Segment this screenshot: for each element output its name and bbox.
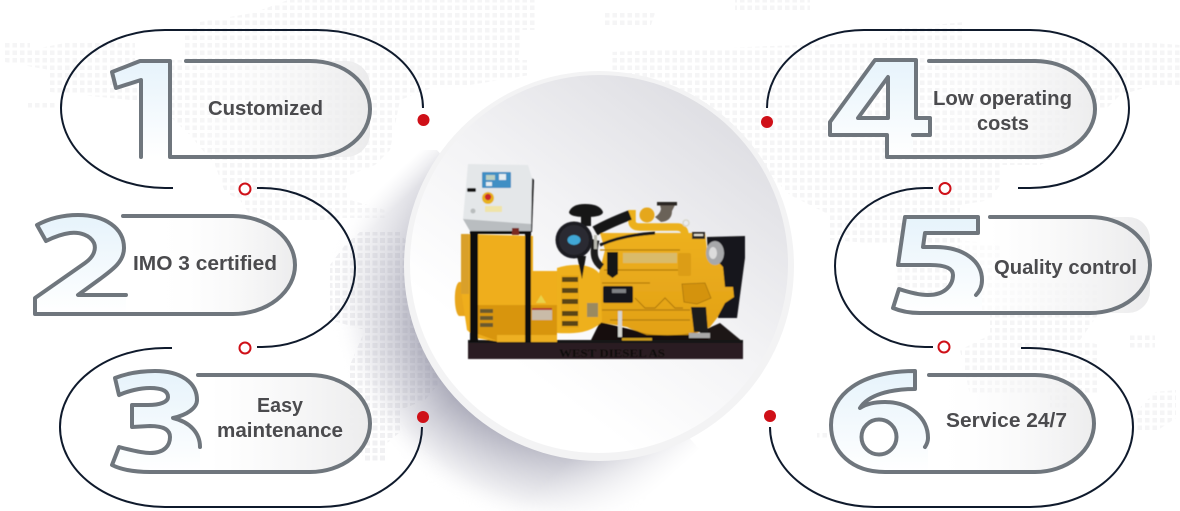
pill 4: Low operating costs: Low operating [933, 88, 1072, 110]
air filter [556, 204, 603, 279]
background: South America dots [330, 232, 442, 462]
control box [463, 164, 534, 235]
pill 4: Low operating costs: costs [977, 113, 1029, 135]
generator illustration [455, 164, 745, 360]
pill 1: Customized [61, 30, 430, 188]
engine mount and dipstick [618, 307, 710, 340]
pill 4: Low operating costs [761, 30, 1129, 188]
pill 5: Quality control [835, 183, 1150, 352]
fuel filter [607, 252, 618, 278]
pill 2: IMO 3 certified: IMO 3 certified [133, 253, 277, 275]
pill 3: Easy maintenance: Easy [257, 395, 304, 417]
frame posts [470, 230, 531, 342]
pill 3: Easy maintenance [60, 348, 429, 507]
starter motor [603, 286, 633, 303]
pill 3: Easy maintenance: maintenance [217, 420, 343, 442]
pill 2: IMO 3 certified [35, 184, 355, 354]
base frame [468, 322, 743, 360]
alternator [455, 234, 557, 342]
pill 5: Quality control: Quality control [994, 257, 1137, 279]
base frame: WEST DIESEL AS [559, 348, 665, 360]
central circle [404, 71, 794, 461]
engine block [557, 233, 734, 335]
alternator pulley [706, 241, 724, 265]
pill 6: Service 24/7: Service 24/7 [946, 410, 1067, 432]
turbo and pipes [594, 202, 705, 267]
pill 6: Service 24/7 [764, 348, 1133, 507]
fan housing [707, 236, 745, 318]
pill 1: Customized: Customized [208, 98, 323, 120]
circle drop shadow [350, 150, 685, 508]
